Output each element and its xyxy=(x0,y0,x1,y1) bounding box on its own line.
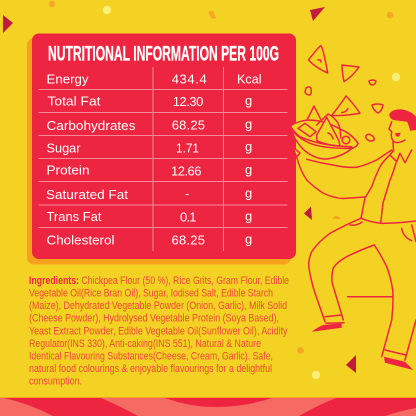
row: total fat: g xyxy=(245,93,252,108)
row: sugar: Sugar xyxy=(46,140,81,155)
row: trans fat: Trans Fat xyxy=(46,209,102,224)
panel body xyxy=(32,34,296,259)
row: energy xyxy=(46,71,262,86)
row: sugar: 1.71 xyxy=(176,140,199,155)
ingredients text: consumption. xyxy=(29,376,82,388)
row: protein: Protein xyxy=(46,162,90,177)
row: saturated fat xyxy=(46,186,252,202)
row: total fat: 12.30 xyxy=(173,94,203,109)
row: total fat xyxy=(48,93,252,109)
row: cholesterol: 68.25 xyxy=(172,232,205,247)
row: saturated fat: - xyxy=(185,186,189,201)
row: protein: 12.66 xyxy=(171,163,202,178)
row: cholesterol: g xyxy=(245,232,252,246)
row: saturated fat: Saturated Fat xyxy=(46,187,128,202)
row: trans fat: g xyxy=(245,208,252,224)
table grid xyxy=(38,67,288,251)
ingredients text: (Maize), Dehydrated Vegetable Powder (Onion, Garlic), Milk Solid xyxy=(29,300,287,312)
bowl with nachos xyxy=(291,106,358,159)
row: cholesterol: Cholesterol xyxy=(46,232,115,247)
face xyxy=(389,122,405,143)
panel shadow xyxy=(27,38,291,264)
row: sugar xyxy=(46,139,252,155)
illustration: man with nacho bowl xyxy=(291,46,416,360)
ingredients text: natural food colourings & enjoyable flavourings for a delightful xyxy=(29,363,272,375)
row: energy: 434.4 xyxy=(172,71,207,86)
row: protein: g xyxy=(245,162,252,177)
ingredients text xyxy=(29,275,289,388)
ingredients text: (Cheese Powder), Hydrolysed Vegetable Protein (Soya Based), xyxy=(29,312,279,324)
row: carbohydrates: 68.25 xyxy=(172,117,205,132)
row: saturated fat: g xyxy=(245,186,252,200)
ingredients text: Vegetable Oil(Rice Bran Oil), Sugar, Iodised Salt, Edible Starch xyxy=(29,288,273,300)
row: total fat: Total Fat xyxy=(48,93,101,108)
row: carbohydrates: g xyxy=(245,116,252,132)
bottom wave band xyxy=(0,397,416,416)
nutrition panel xyxy=(27,34,296,264)
legs xyxy=(309,218,361,322)
row: energy: Kcal xyxy=(237,71,262,86)
row: trans fat: 0.1 xyxy=(180,210,196,225)
row: cholesterol xyxy=(46,232,252,247)
ingredients text: Identical Flavouring Substances(Cheese, Cream, Garlic). Safe, xyxy=(29,350,273,362)
row: protein xyxy=(46,162,252,178)
row: carbohydrates xyxy=(46,116,252,133)
row: sugar: g xyxy=(245,139,252,154)
ingredients text: Regulator(INS 330), Anti-caking(INS 551), Natural & Nature xyxy=(29,338,261,350)
arm and torso xyxy=(307,150,392,167)
row: trans fat xyxy=(46,208,252,225)
ingredients text: Ingredients: Chickpea Flour (50 %), Rice Grits, Gram Flour, Edible xyxy=(29,275,289,287)
flying nachos xyxy=(305,46,383,141)
row: carbohydrates: Carbohydrates xyxy=(46,118,136,133)
hair, mouth and shoes xyxy=(312,109,416,370)
ingredients text: Yeast Extract Powder, Edible Vegetable Oil(Sunflower Oil), Acidity xyxy=(29,326,288,338)
row: energy: Energy xyxy=(46,71,89,86)
